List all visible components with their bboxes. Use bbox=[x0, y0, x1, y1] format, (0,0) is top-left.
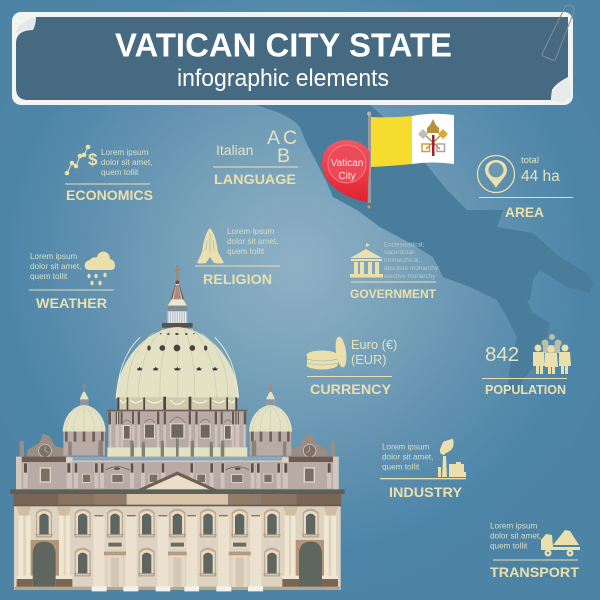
transport text: quem tollit bbox=[490, 542, 528, 550]
divider bbox=[380, 478, 466, 479]
map of Italy bbox=[256, 105, 593, 393]
industry text bbox=[382, 442, 433, 472]
divider bbox=[482, 378, 567, 379]
economics text: Lorem ipsum bbox=[101, 148, 149, 157]
language name: Italian bbox=[216, 142, 253, 158]
icon: letters: A bbox=[267, 127, 280, 149]
government text bbox=[384, 242, 440, 280]
icon: paperclip bbox=[542, 5, 574, 60]
divider bbox=[65, 184, 150, 185]
subtitle: infographic elements bbox=[177, 65, 389, 92]
icon: growth chart: $ bbox=[88, 150, 98, 169]
religion text: Lorem ipsum bbox=[227, 227, 275, 236]
divider bbox=[29, 290, 114, 291]
panel: transport bbox=[490, 522, 580, 580]
transport text bbox=[490, 522, 541, 550]
currency values: Euro (€) bbox=[351, 337, 397, 352]
divider bbox=[195, 266, 280, 267]
icon: letters bbox=[267, 127, 297, 167]
transport text: Lorem ipsum bbox=[490, 522, 538, 530]
population value: 842 bbox=[485, 343, 519, 366]
area values: total bbox=[521, 155, 539, 166]
divider bbox=[479, 197, 573, 198]
area heading: AREA bbox=[505, 204, 544, 220]
divider bbox=[213, 166, 298, 168]
transport heading: TRANSPORT bbox=[490, 564, 579, 580]
icon: factory bbox=[438, 439, 466, 477]
icon: letters: C bbox=[283, 127, 297, 149]
industry text: Lorem ipsum bbox=[382, 442, 430, 452]
panel: population bbox=[482, 334, 571, 397]
panel: economics bbox=[65, 145, 153, 203]
area values: 44 ha bbox=[521, 168, 560, 185]
illustration: St. Peter's Basilica bbox=[10, 265, 345, 591]
industry heading: INDUSTRY bbox=[389, 484, 463, 500]
religion text bbox=[227, 227, 278, 256]
government text: absolute monarchy; bbox=[384, 265, 440, 272]
religion heading: RELIGION bbox=[203, 271, 272, 287]
industry text: quem tollit bbox=[382, 462, 420, 472]
government text: sacerdotal- bbox=[384, 249, 416, 256]
weather heading: WEATHER bbox=[36, 295, 107, 311]
currency values bbox=[351, 337, 397, 367]
panel: religion bbox=[195, 227, 280, 287]
map pin: Vatican City: Vatican bbox=[331, 158, 363, 169]
language heading: LANGUAGE bbox=[214, 171, 296, 187]
weather text: Lorem ipsum bbox=[30, 252, 78, 261]
population heading: POPULATION bbox=[485, 382, 566, 397]
economics heading: ECONOMICS bbox=[66, 187, 153, 203]
panel: government bbox=[350, 242, 440, 301]
panel: language bbox=[213, 127, 298, 187]
government text: elective monarchy bbox=[384, 273, 436, 280]
divider bbox=[307, 376, 392, 377]
panel: currency bbox=[306, 336, 397, 397]
currency values: (EUR) bbox=[351, 352, 387, 367]
panel: weather bbox=[29, 252, 115, 311]
icon: dump truck bbox=[541, 530, 580, 556]
title: VATICAN CITY STATE bbox=[115, 26, 452, 64]
currency heading: CURRENCY bbox=[310, 381, 392, 397]
icon: letters: B bbox=[277, 145, 290, 167]
government text: Ecclesiastical; bbox=[384, 242, 424, 248]
industry text: dolor sit amet, bbox=[382, 452, 433, 462]
title banner bbox=[12, 12, 573, 105]
divider bbox=[351, 282, 436, 283]
government heading: GOVERNMENT bbox=[350, 287, 437, 301]
area values bbox=[521, 155, 560, 185]
weather text bbox=[30, 252, 81, 281]
icon: coins bbox=[306, 336, 348, 370]
icon: praying hands bbox=[197, 228, 224, 264]
icon: rain cloud bbox=[85, 252, 115, 285]
map pin: Vatican City bbox=[322, 140, 370, 202]
icon: people bbox=[533, 334, 571, 374]
map pin: Vatican City: City bbox=[338, 171, 356, 182]
religion text: dolor sit amet, bbox=[227, 237, 278, 246]
icon: government building bbox=[350, 243, 383, 278]
flag of Vatican City bbox=[367, 112, 454, 208]
economics text bbox=[101, 148, 152, 177]
panel: area bbox=[478, 155, 573, 220]
weather text: dolor sit amet, bbox=[30, 262, 81, 271]
divider bbox=[493, 560, 578, 561]
government text: monarchical; bbox=[384, 257, 420, 264]
weather text: quem tollit bbox=[30, 272, 68, 281]
economics text: quem tollit bbox=[101, 168, 139, 177]
icon: location pin bbox=[478, 156, 514, 192]
religion text: quem tollit bbox=[227, 247, 265, 256]
panel: industry bbox=[380, 439, 466, 500]
transport text: dolor sit amet, bbox=[490, 532, 541, 540]
economics text: dolor sit amet, bbox=[101, 158, 152, 167]
